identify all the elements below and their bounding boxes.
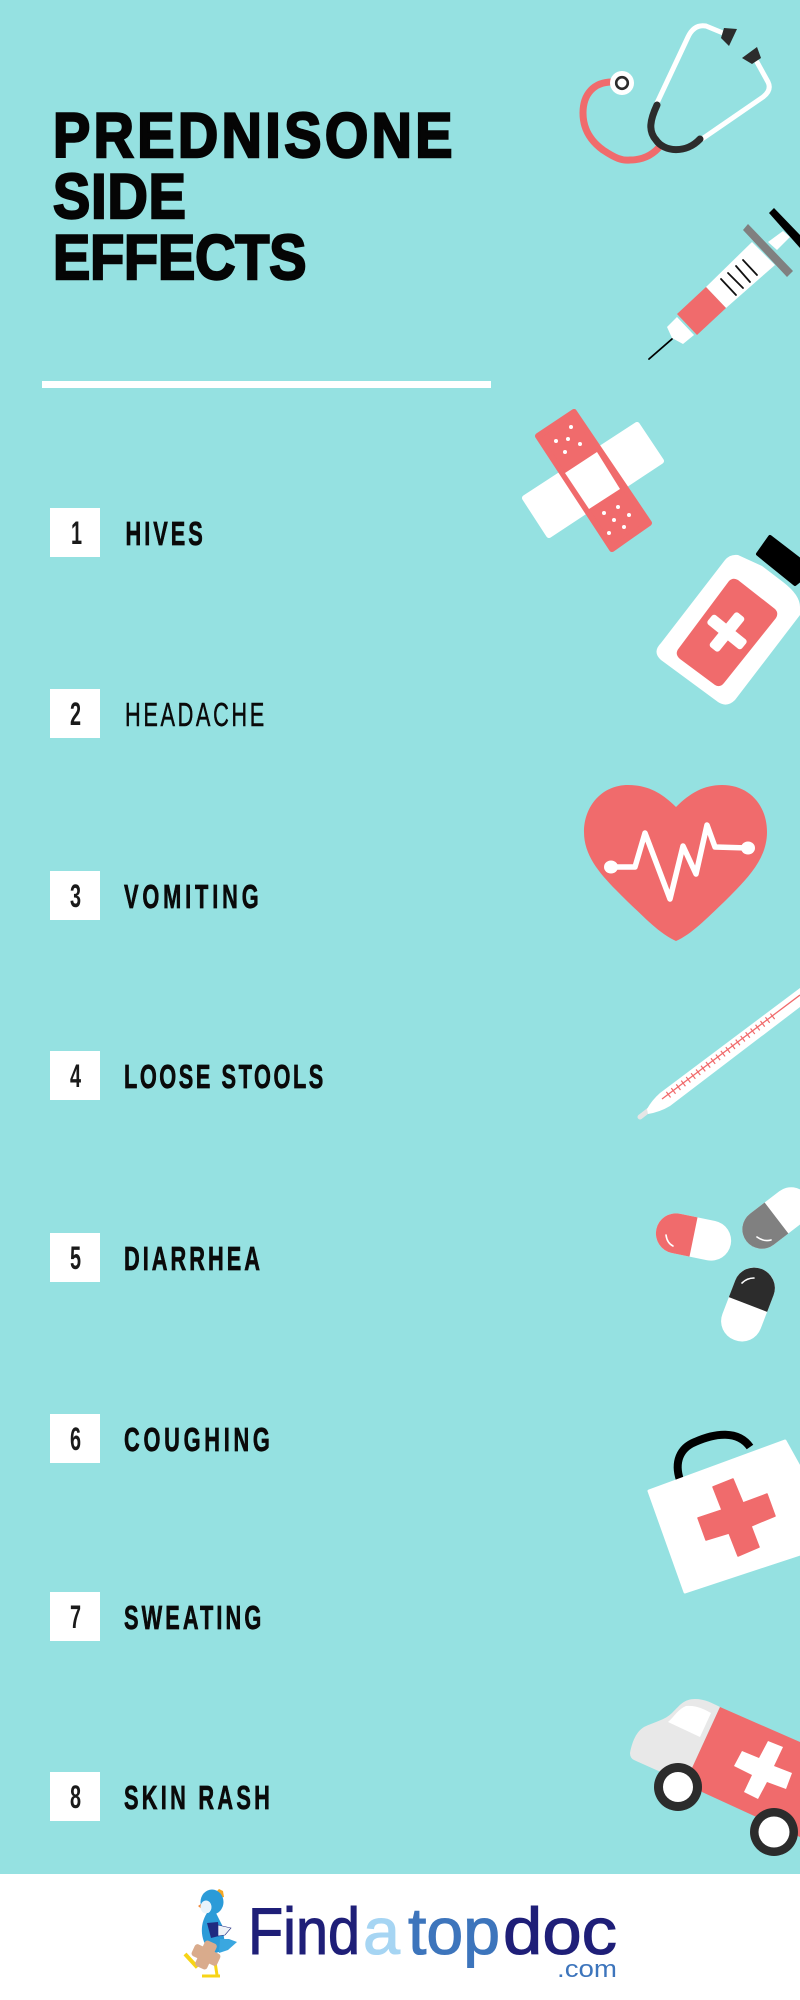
divider line [42,381,491,388]
icon: ambulance [630,1699,800,1856]
list item 5: diarrhea: DIARRHEA [124,1240,260,1277]
icon: black and white pill [715,1262,781,1347]
list item 8: skin rash: 8 [70,1779,81,1815]
list item 6: coughing [50,1414,270,1463]
title: SIDE [53,161,186,232]
logo wordmark [248,1894,617,1983]
list item 7: sweating: 7 [70,1599,81,1635]
list item 1: hives: 1 [71,515,82,551]
list item 3: vomiting: VOMITING [124,878,259,915]
logo wordmark: top [408,1894,500,1968]
icon: syringe [649,208,800,359]
title [53,100,453,293]
logo wordmark: doc [503,1894,617,1968]
list item 4: loose stools: LOOSE STOOLS [124,1058,323,1095]
list item 7: sweating [50,1592,261,1641]
list item 5: diarrhea: 5 [70,1240,81,1276]
list item 8: skin rash: SKIN RASH [124,1779,270,1816]
icon: bandage [525,412,661,549]
icon: first aid kit [649,1435,800,1592]
icon: red and white pill [652,1210,735,1264]
list item 6: coughing: COUGHING [124,1421,270,1458]
logo wordmark: a [363,1894,400,1968]
logo wordmark: .com [557,1956,617,1983]
list item 2: headache [50,689,264,738]
title: EFFECTS [53,222,306,293]
footer panel [0,1874,800,2000]
list item 2: headache: HEADACHE [125,696,264,733]
icon: stethoscope [583,26,769,160]
list item 3: vomiting: 3 [70,878,81,914]
list item 3: vomiting [50,871,259,920]
title: PREDNISONE [53,100,453,171]
list item 7: sweating: SWEATING [124,1599,261,1636]
icon: grey and white pill [734,1179,800,1257]
list item 5: diarrhea [50,1233,260,1282]
list item 6: coughing: 6 [70,1421,81,1457]
list item 1: hives: HIVES [126,515,203,552]
logo wordmark: Find [248,1894,360,1968]
list item 4: loose stools: 4 [70,1058,81,1094]
icon: heart with heartbeat [584,785,767,941]
list item 1: hives [50,508,203,557]
list item 2: headache: 2 [70,696,81,732]
logo mascot: duck [185,1889,237,1976]
icon: medicine bottle [656,537,800,705]
list item 4: loose stools [50,1051,323,1100]
list item 8: skin rash [50,1772,270,1821]
icon: thermometer [640,988,800,1117]
